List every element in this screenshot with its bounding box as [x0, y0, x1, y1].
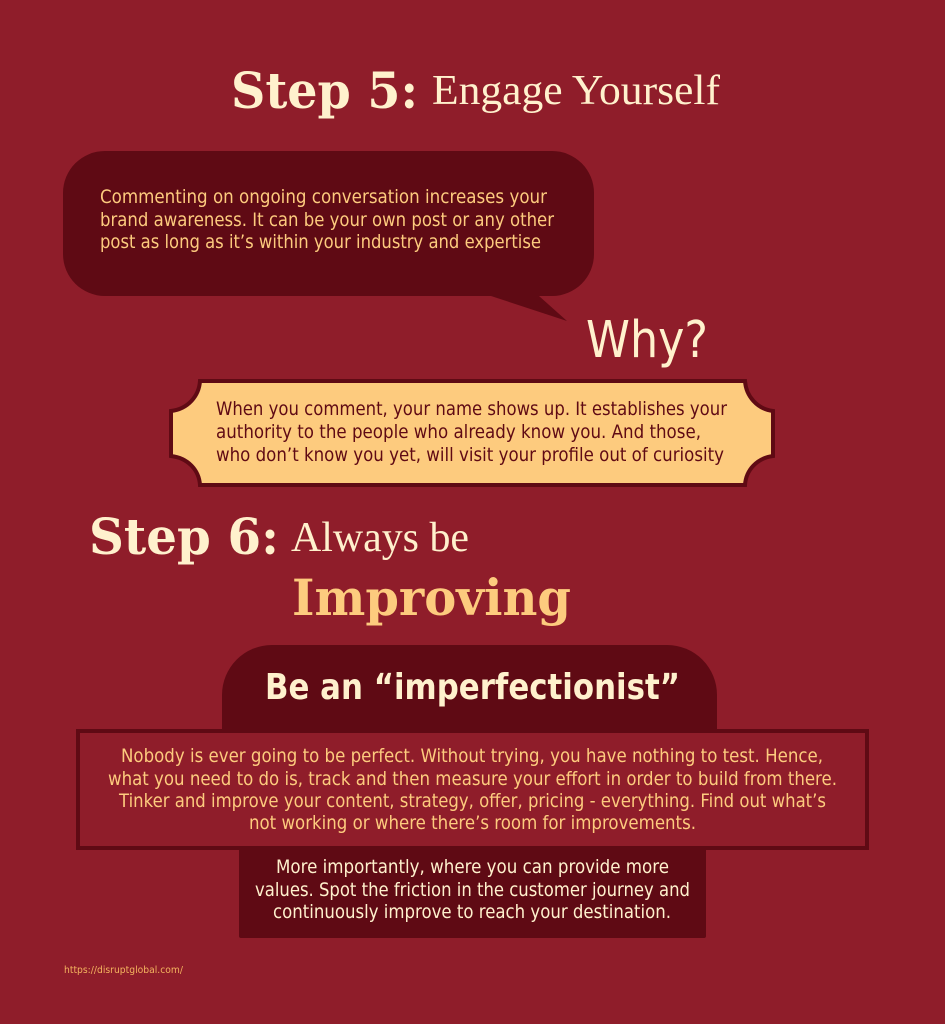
speech bubble: commenting: Commenting on ongoing conversation increases your	[100, 186, 547, 208]
speech bubble: commenting: brand awareness. It can be your own post or any other	[100, 209, 554, 231]
plaque: why explanation	[171, 381, 773, 485]
speech bubble: commenting: post as long as it’s within your industry and expertise	[100, 231, 541, 253]
panel: lower dark box: continuously improve to reach your destination.	[273, 901, 671, 923]
speech bubble: commenting	[63, 151, 594, 321]
panel: lower dark box: values. Spot the friction in the customer journey and	[255, 879, 690, 901]
panel: lower dark box: More importantly, where you can provide more	[276, 856, 669, 878]
panel: bordered text box: not working or where there’s room for improvements.	[249, 812, 696, 834]
plaque: why explanation: who don’t know you yet, will visit your profile out of curiosity	[216, 444, 724, 466]
panel: imperfectionist tab: Be an “imperfectionist”	[265, 667, 680, 708]
heading: step 5: Step 5:	[231, 61, 418, 120]
panel: imperfectionist tab	[222, 645, 717, 732]
panel: bordered text box: Nobody is ever going to be perfect. Without trying, you have nothing to test. Hence,	[121, 745, 823, 767]
heading: step 6	[89, 507, 571, 627]
heading: why: Why?	[586, 311, 708, 370]
plaque: why explanation: authority to the people who already know you. And those,	[216, 421, 701, 443]
heading: step 6: Step 6:	[89, 507, 279, 566]
heading: step 5	[231, 61, 720, 120]
heading: step 5: Engage Yourself	[432, 68, 720, 114]
heading: step 6: Improving	[292, 568, 571, 627]
panel: lower dark box	[239, 848, 706, 938]
source url: https://disruptglobal.com/	[64, 965, 184, 976]
plaque: why explanation: When you comment, your name shows up. It establishes your	[216, 398, 727, 420]
panel: bordered text box: what you need to do is, track and then measure your effort in order to build from there.	[108, 768, 837, 790]
heading: step 6: Always be	[291, 515, 469, 561]
panel: bordered text box: Tinker and improve your content, strategy, offer, pricing - everything. Find out what’s	[118, 790, 826, 812]
panel: bordered text box	[78, 731, 867, 848]
